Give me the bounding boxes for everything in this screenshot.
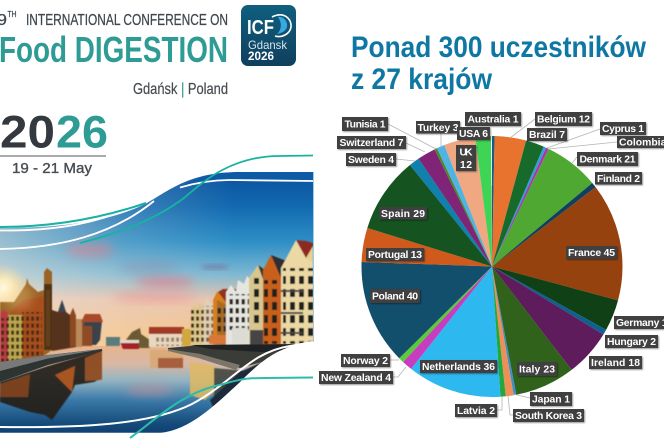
heading: Food DIGESTION: Food DIGESTION	[0, 29, 228, 70]
photo: Gdansk waterfront	[0, 170, 313, 436]
title: z 27 krajów	[351, 63, 493, 96]
label: Tunisia: Tunisia 1	[344, 120, 386, 130]
label: Finland: Finland 2	[597, 174, 640, 185]
text: location: Gdańsk | Poland	[133, 81, 228, 98]
label: USA: USA 6	[459, 129, 488, 140]
swoosh: top teal lines	[0, 156, 313, 243]
swoosh: top blue band	[178, 172, 313, 188]
label: Sweden: Sweden 4	[348, 155, 394, 166]
label: Denmark: Denmark 21	[580, 154, 636, 166]
title	[351, 31, 647, 96]
pie chart: participants by country	[425, 200, 559, 334]
label: Switzerland: Switzerland 7	[340, 138, 404, 149]
label: Poland: Poland 40	[372, 292, 418, 302]
text: dates: 19 - 21 May	[12, 161, 93, 177]
embankment	[0, 349, 102, 382]
heading: conference name line	[0, 10, 228, 29]
label: UK: UK	[460, 148, 473, 158]
text: year 2026	[0, 106, 108, 158]
heading: conference name line: INTERNATIONAL CONFERENCE ON	[26, 12, 228, 29]
edge strip	[313, 172, 314, 342]
text: year 2026: 20	[0, 106, 55, 158]
label: France: France 45	[568, 248, 615, 259]
logo: ICF Gdansk 2026: 2026	[248, 49, 274, 63]
label: UK: 12	[460, 160, 472, 171]
label: Ireland: Ireland 18	[591, 358, 640, 369]
label: Brazil: Brazil 7	[529, 130, 565, 141]
label: Spain: Spain 29	[381, 209, 425, 220]
label: Cyprus: Cyprus 1	[602, 124, 644, 135]
label: UK	[456, 145, 476, 171]
label: South Korea: South Korea 3	[515, 411, 582, 422]
label: Hungary: Hungary 2	[607, 337, 656, 348]
logo: ICF Gdansk 2026: ICF	[247, 17, 274, 39]
label: Australia: Australia 1	[468, 114, 519, 126]
logo: ICF Gdansk 2026	[241, 5, 296, 66]
swoosh: bottom white and teal lines	[0, 342, 313, 438]
modern waterfront houses	[191, 240, 313, 345]
panel: conference poster	[0, 5, 314, 438]
distant city and ship	[106, 327, 191, 349]
label: Japan: Japan 1	[532, 394, 570, 406]
label: New Zealand: New Zealand 4	[321, 373, 391, 384]
label: Turkey: Turkey 3	[418, 123, 459, 134]
label: Portugal: Portugal 13	[368, 250, 422, 261]
leader lines	[388, 119, 617, 415]
quay	[168, 346, 289, 368]
old town buildings	[0, 268, 103, 364]
label: Norway: Norway 2	[343, 356, 388, 367]
label: Belgium: Belgium 12	[537, 114, 590, 126]
label: Netherlands: Netherlands 36	[422, 362, 495, 373]
label: Latvia: Latvia 2	[457, 406, 495, 417]
water	[0, 346, 288, 433]
logo: ICF Gdansk 2026: Gdansk	[248, 38, 288, 52]
text: year 2026: 26	[56, 106, 108, 158]
swoosh: top white lines	[0, 180, 313, 249]
label: Italy: Italy 23	[519, 364, 555, 376]
data labels	[319, 112, 664, 422]
heading: conference name line: TH	[8, 10, 17, 19]
